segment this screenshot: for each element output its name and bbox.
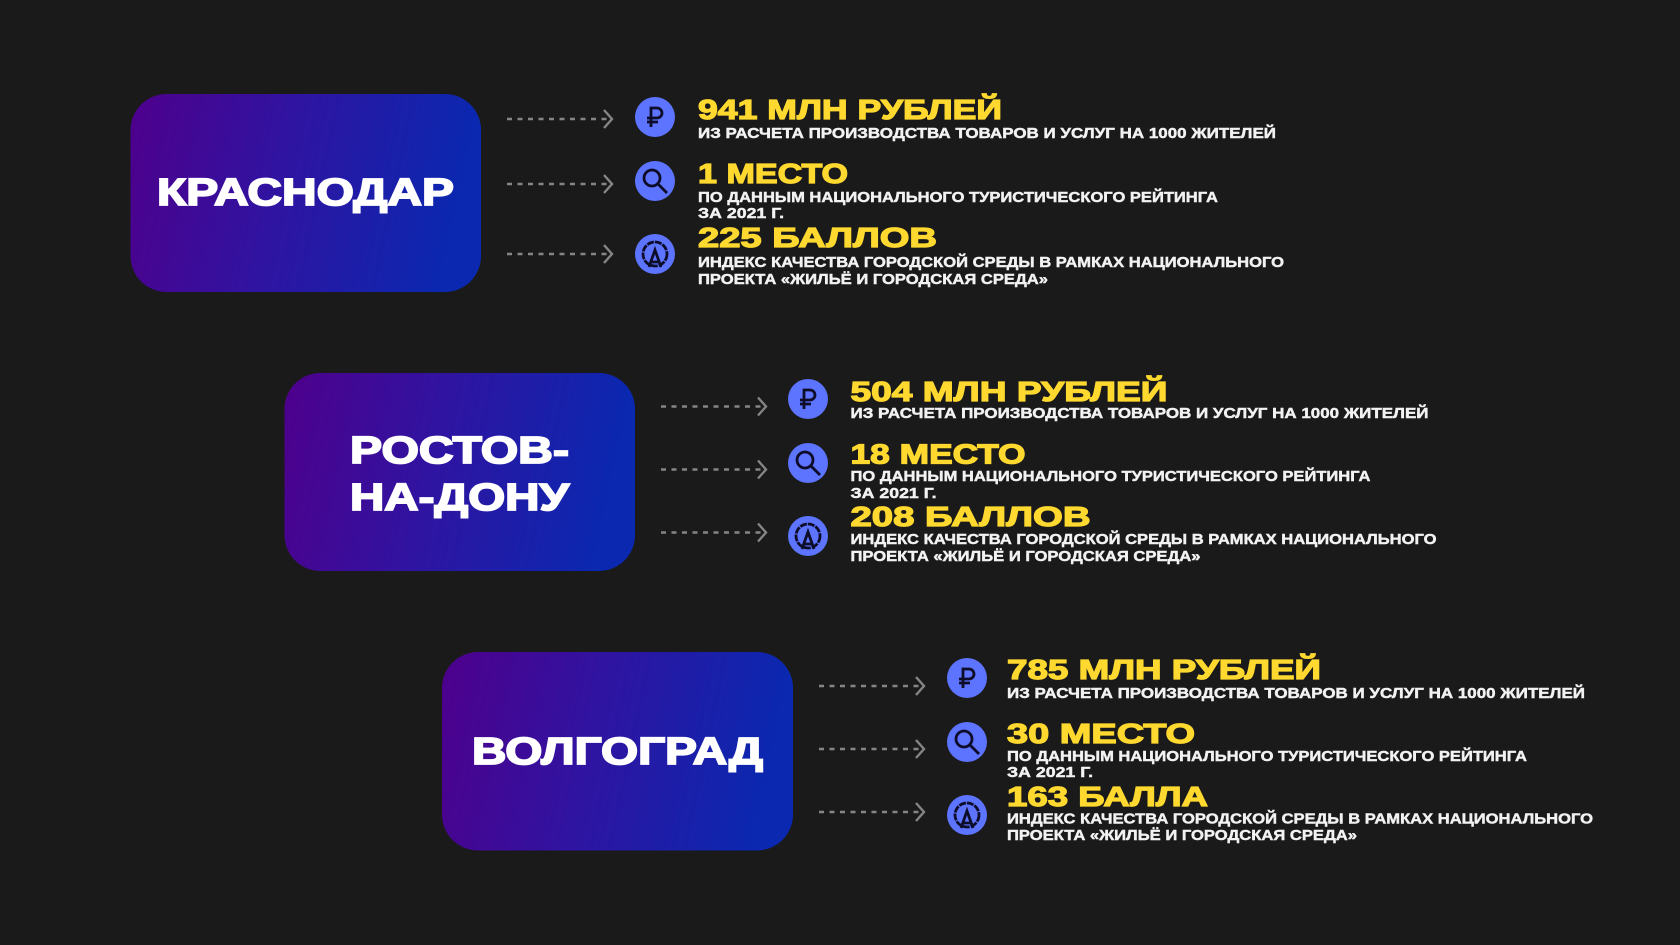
stat: tourism rank: ПО ДАННЫМ НАЦИОНАЛЬНОГО ТУРИСТИЧЕСКОГО РЕЙТИНГА <box>850 467 1371 485</box>
icon: ruble <box>947 658 987 698</box>
stat: urban index: 225 БАЛЛОВ <box>698 222 937 253</box>
panel: Ростов-на-Дону <box>284 373 635 571</box>
stat: turnover: 941 МЛН РУБЛЕЙ <box>698 93 1002 125</box>
panel: Краснодар <box>130 94 481 292</box>
group: Ростов-на-Дону <box>284 373 1436 571</box>
stat: turnover: 785 МЛН РУБЛЕЙ <box>1007 653 1321 685</box>
arrow 2 <box>507 175 612 193</box>
stat: turnover <box>698 93 1276 142</box>
icon: ferris wheel <box>635 234 675 274</box>
stat: urban index: ИНДЕКС КАЧЕСТВА ГОРОДСКОЙ СРЕДЫ В РАМКАХ НАЦИОНАЛЬНОГО <box>850 530 1436 548</box>
stat: turnover <box>850 375 1428 422</box>
stat: tourism rank: ЗА 2021 Г. <box>850 486 936 502</box>
stat: urban index: ПРОЕКТА «ЖИЛЬЁ И ГОРОДСКАЯ СРЕДА» <box>1007 827 1357 844</box>
arrow 2 <box>819 740 924 758</box>
arrow 3 <box>819 803 924 821</box>
icon: ruble <box>635 97 675 137</box>
panel: Ростов-на-Дону: НА-ДОНУ <box>350 477 569 519</box>
panel: Ростов-на-Дону: РОСТОВ- <box>350 430 569 472</box>
stat: tourism rank: 30 МЕСТО <box>1007 718 1195 749</box>
stat: tourism rank <box>850 438 1371 502</box>
stat: turnover: ИЗ РАСЧЕТА ПРОИЗВОДСТВА ТОВАРОВ И УСЛУГ НА 1000 ЖИТЕЛЕЙ <box>1007 684 1585 702</box>
stat: urban index: ИНДЕКС КАЧЕСТВА ГОРОДСКОЙ СРЕДЫ В РАМКАХ НАЦИОНАЛЬНОГО <box>1007 810 1593 828</box>
stat: tourism rank: ЗА 2021 Г. <box>698 206 784 222</box>
stat: tourism rank <box>1007 718 1528 781</box>
stat: urban index <box>1007 781 1593 844</box>
icon: search <box>788 443 828 483</box>
stat: tourism rank: ЗА 2021 Г. <box>1007 765 1093 781</box>
icon: search <box>947 722 987 762</box>
panel: Волгоград: ВОЛГОГРАД <box>472 731 763 773</box>
stat: turnover: 504 МЛН РУБЛЕЙ <box>850 375 1168 407</box>
arrow 3 <box>661 524 766 542</box>
arrow 1 <box>661 398 766 416</box>
icon: ferris wheel <box>947 795 987 835</box>
stat: urban index: ПРОЕКТА «ЖИЛЬЁ И ГОРОДСКАЯ СРЕДА» <box>850 548 1200 565</box>
stat: urban index: 163 БАЛЛА <box>1007 781 1208 812</box>
panel: Краснодар: КРАСНОДАР <box>157 172 454 214</box>
stat: turnover: ИЗ РАСЧЕТА ПРОИЗВОДСТВА ТОВАРОВ И УСЛУГ НА 1000 ЖИТЕЛЕЙ <box>850 404 1428 422</box>
stat: urban index <box>850 501 1436 565</box>
stat: turnover: ИЗ РАСЧЕТА ПРОИЗВОДСТВА ТОВАРОВ И УСЛУГ НА 1000 ЖИТЕЛЕЙ <box>698 124 1276 142</box>
stat: urban index <box>698 222 1284 288</box>
group: Волгоград <box>442 652 1593 850</box>
stat: tourism rank: ПО ДАННЫМ НАЦИОНАЛЬНОГО ТУРИСТИЧЕСКОГО РЕЙТИНГА <box>698 188 1219 206</box>
arrow 3 <box>507 245 612 263</box>
stat: tourism rank: ПО ДАННЫМ НАЦИОНАЛЬНОГО ТУРИСТИЧЕСКОГО РЕЙТИНГА <box>1007 747 1528 765</box>
stat: urban index: 208 БАЛЛОВ <box>850 501 1090 532</box>
arrow 1 <box>507 110 612 128</box>
icon: search <box>635 161 675 201</box>
group: Краснодар <box>130 93 1284 292</box>
panel: Волгоград <box>442 652 793 850</box>
stat: turnover <box>1007 653 1585 702</box>
stat: tourism rank: 1 МЕСТО <box>698 158 848 189</box>
arrow 1 <box>819 677 924 695</box>
arrow 2 <box>661 460 766 478</box>
stat: urban index: ПРОЕКТА «ЖИЛЬЁ И ГОРОДСКАЯ СРЕДА» <box>698 271 1048 288</box>
stat: tourism rank <box>698 158 1219 222</box>
stat: urban index: ИНДЕКС КАЧЕСТВА ГОРОДСКОЙ СРЕДЫ В РАМКАХ НАЦИОНАЛЬНОГО <box>698 253 1284 271</box>
icon: ruble <box>788 379 828 419</box>
stat: tourism rank: 18 МЕСТО <box>850 438 1026 470</box>
icon: ferris wheel <box>788 516 828 556</box>
